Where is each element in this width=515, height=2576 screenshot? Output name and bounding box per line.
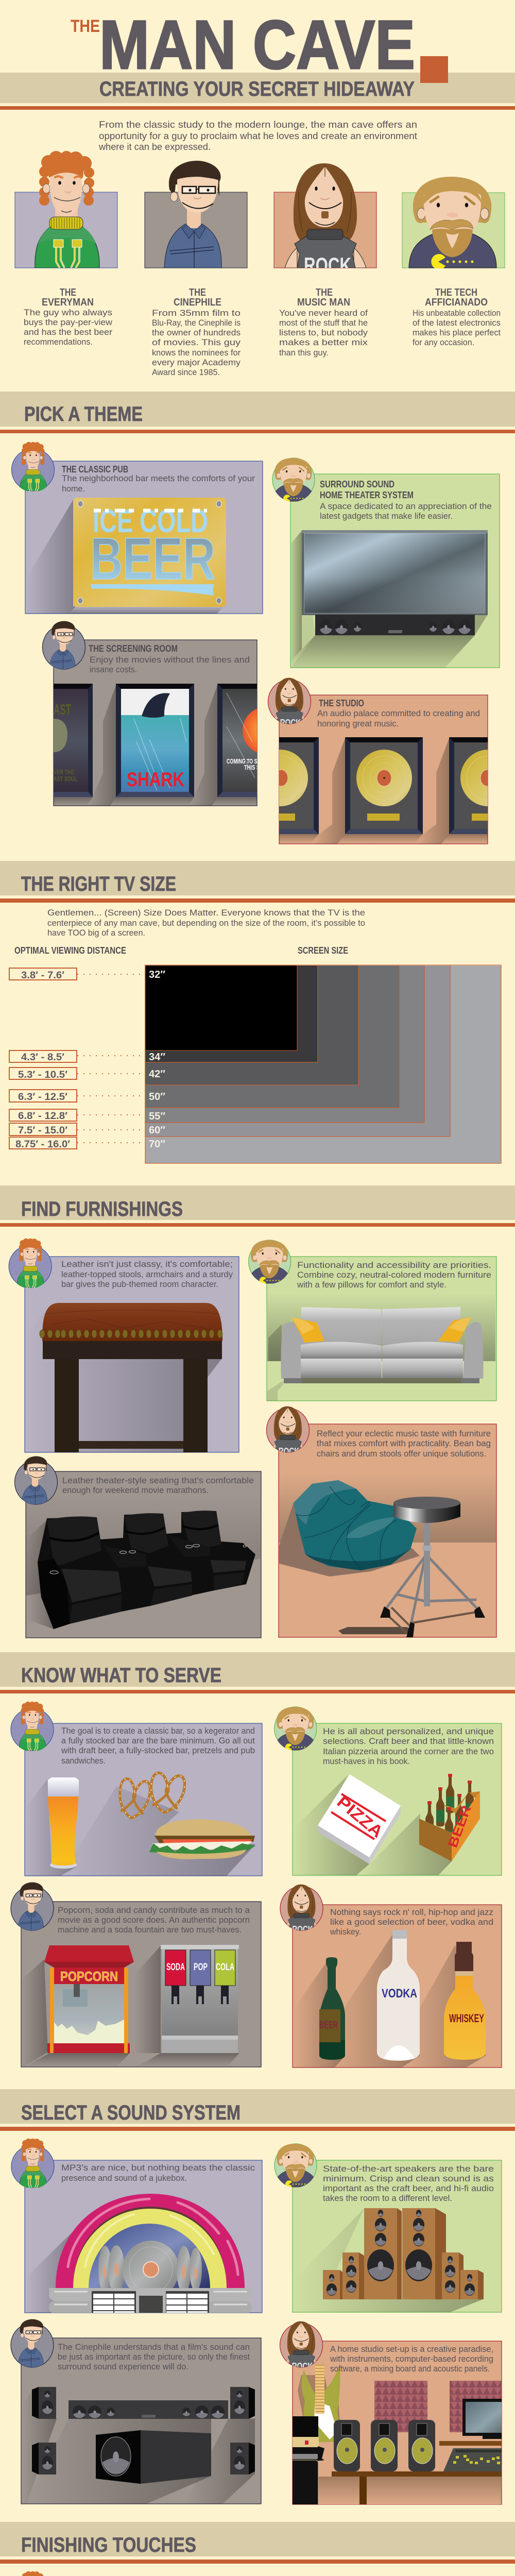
tv size intro text <box>47 908 365 938</box>
illustration: movie poster frames: THIS S <box>244 764 260 771</box>
avatar: everyman <box>11 1702 54 1751</box>
illustration: ice cold beer sign <box>26 498 226 614</box>
card text: movie as a good score does. An authentic popcorn <box>58 1916 250 1925</box>
illustration: popcorn machine and soda fountain <box>21 1945 239 2067</box>
chart: nested screen sizes: 70″ <box>149 1139 165 1150</box>
subtitle: CREATING YOUR SECRET HIDEAWAY <box>99 78 415 100</box>
card heading <box>320 479 414 500</box>
chart: nested screen sizes: 34″ <box>149 1052 165 1063</box>
illustration: leather bar stool <box>25 1303 222 1452</box>
card text <box>330 1908 493 1937</box>
illustration: movie poster frames: COMING TO SA <box>227 757 261 765</box>
character: the music man <box>274 163 376 358</box>
card text <box>61 1726 255 1766</box>
card heading: THE SCREENING ROOM <box>89 643 178 654</box>
panel: surround sound home theater system <box>272 458 500 668</box>
card text <box>61 2163 255 2183</box>
avatar: tech afficianado <box>272 458 315 502</box>
card text: Nothing says rock n' roll, hip-hop and jazz <box>330 1908 493 1917</box>
header stripe <box>0 106 515 110</box>
character: the music man: THE <box>316 287 333 298</box>
avatar: music man: ROCK <box>292 1924 313 1935</box>
card text <box>62 474 255 494</box>
header band <box>0 73 515 103</box>
character: the cinephile <box>145 161 247 377</box>
card text: The neighborhood bar meets the comforts of your <box>62 474 255 483</box>
panel: popcorn and soda <box>11 1883 261 2067</box>
title block <box>0 7 515 110</box>
panel: theater seating <box>14 1456 261 1638</box>
section heading: select a sound system: SELECT A SOUND SYSTEM <box>21 2102 241 2124</box>
character: the tech afficianado: for any occasion. <box>413 338 474 347</box>
card text: A space dedicated to an appreciation of the <box>320 502 492 511</box>
panel: pizza and craft beer <box>274 1707 502 1875</box>
illustration: bean bag and drum stool <box>279 1473 496 1637</box>
card text: that mixes comfort with practicality. Bean bag <box>317 1439 491 1448</box>
card text <box>62 1476 254 1495</box>
illustration: pizza box and six pack: PIZZA <box>334 1792 387 1841</box>
character: the everyman: buys the pay-per-view <box>24 318 112 327</box>
character: the everyman: recommendations. <box>24 337 93 347</box>
chart: viewing distance labels <box>9 968 145 1150</box>
intro text <box>98 120 417 152</box>
card text: takes the room to a different level. <box>323 2194 452 2203</box>
card text: enough for weekend movie marathons. <box>62 1486 209 1495</box>
avatar: cinephile <box>14 1456 58 1504</box>
chart: viewing distance labels: 6.8′ - 12.8′ <box>18 1111 67 1122</box>
accent square <box>420 56 448 83</box>
card text <box>90 655 250 674</box>
card text: A home studio set-up is a creative paradise, <box>330 2345 493 2354</box>
character: the tech afficianado: AFFICIANADO <box>425 297 488 308</box>
section heading: select a sound system <box>0 2089 515 2131</box>
card text: presence and sound of a jukebox. <box>61 2174 187 2183</box>
character: the tech afficianado <box>402 177 505 347</box>
character: the music man: MUSIC MAN <box>297 297 350 308</box>
character: the music man: You've never heard of <box>279 309 368 318</box>
section heading: pick a theme <box>0 392 515 433</box>
card text: sandwiches. <box>61 1756 106 1766</box>
intro text: where it can be expressed. <box>98 142 211 152</box>
illustration: bottles <box>293 1930 486 2067</box>
card heading: HOME THEATER SYSTEM <box>320 490 414 500</box>
card text: home. <box>62 484 85 494</box>
avatar: everyman <box>11 2571 54 2576</box>
illustration: bottles: VODKA <box>382 1987 417 2001</box>
card text: Popcorn, soda and candy contribute as much to a <box>58 1906 250 1915</box>
card text: He is all about personalized, and unique <box>323 1727 494 1736</box>
panel: high end speakers <box>274 2144 502 2312</box>
card text <box>58 1906 250 1935</box>
card heading: SURROUND SOUND <box>320 479 394 489</box>
card text <box>323 2164 494 2203</box>
card text: bar gives the pub-themed room character. <box>61 1280 218 1289</box>
avatar: everyman <box>11 2139 54 2188</box>
section heading: know what to serve <box>0 1652 515 1693</box>
illustration: leather theater seats <box>26 1510 261 1629</box>
chart: viewing distance labels: 8.75′ - 16.0′ <box>15 1139 70 1150</box>
intro text: opportunity for a guy to proclaim what he loves and create an environment <box>99 131 417 141</box>
panel: jukebox <box>11 2139 262 2314</box>
tv size intro text: centerpiece of any man cave, but depending on the size of the room, it's possible to <box>47 919 365 928</box>
card text: with a few pillows for comfort and style. <box>297 1280 447 1290</box>
chart: viewing distance labels: 6.3′ - 12.5′ <box>18 1092 67 1103</box>
avatar: music man <box>267 1406 309 1456</box>
avatar: music man: ROCK <box>280 717 301 728</box>
avatar: music man <box>268 678 311 728</box>
panel: home studio <box>280 2321 504 2504</box>
card text: important as the craft beer, and hi-fi audio <box>323 2184 494 2193</box>
illustration: ice cold beer sign: ICE COLD <box>93 503 208 539</box>
card heading: THE STUDIO <box>319 698 364 708</box>
character: the everyman: The guy who always <box>24 308 112 317</box>
section heading: find furnishings: FIND FURNISHINGS <box>21 1198 183 1221</box>
card text: selections. Craft beer and that little-known <box>323 1737 494 1746</box>
card text: leather-topped stools, armchairs and a sturdy <box>61 1270 233 1279</box>
card text <box>317 1429 491 1459</box>
character: the cinephile: THE <box>189 287 206 298</box>
card text: minimum. Crisp and clean sound is as <box>323 2174 494 2183</box>
panel: bean bag and drum stool <box>267 1406 496 1637</box>
illustration: surround speakers and subwoofer <box>22 2387 255 2504</box>
avatar: cinephile <box>11 1883 54 1930</box>
panel: modern sofa <box>249 1240 496 1401</box>
panel: leather pub stool <box>9 1239 239 1452</box>
card heading: THE CLASSIC PUB <box>62 464 128 474</box>
illustration: jukebox <box>26 2194 252 2314</box>
avatar: music man: ROCK <box>292 2361 313 2371</box>
chart: viewing distance labels: 5.3′ - 10.5′ <box>18 1070 67 1080</box>
character: the cinephile: the owner of hundreds <box>152 328 241 337</box>
card text: insane costs. <box>90 665 137 674</box>
avatar: cinephile <box>42 621 85 669</box>
illustration: bottles: WHISKEY <box>449 2012 484 2025</box>
card text: Reflect your eclectic music taste with furniture <box>317 1429 491 1438</box>
card text: software, a mixing board and acoustic panels. <box>330 2364 490 2374</box>
card text: Leather theater-style seating that's comfortable <box>62 1476 254 1485</box>
character: the music man: most of the stuff that he <box>279 318 368 328</box>
chart: nested screen sizes: 42″ <box>149 1069 165 1080</box>
character: the music man: than this guy. <box>279 348 329 358</box>
card text: honoring great music. <box>317 719 399 728</box>
illustration: home recording studio <box>293 2365 504 2504</box>
avatar: music man <box>280 1885 323 1935</box>
character: the everyman: EVERYMAN <box>42 297 94 308</box>
card text: Combine cozy, neutral-colored modern furniture <box>297 1270 491 1280</box>
card text: whiskey. <box>330 1927 361 1937</box>
illustration: popcorn machine and soda fountain: POPCORN <box>60 1969 118 1984</box>
section heading: finishing touches <box>0 2522 515 2564</box>
avatar: tech afficianado <box>274 2144 317 2188</box>
illustration: movie poster frames: VER THE <box>54 768 74 776</box>
illustration: beer, pretzels and sandwich <box>25 1772 255 1876</box>
panel: surround sound system <box>11 2319 261 2504</box>
illustration: popcorn machine and soda fountain: SODA <box>166 1962 185 1973</box>
character: the cinephile: Award since 1985. <box>152 368 220 377</box>
card text <box>330 2345 493 2374</box>
chart: nested screen sizes: 60″ <box>149 1125 165 1136</box>
illustration: grey sofa with pillows <box>267 1293 495 1401</box>
chart: nested screen sizes: 32″ <box>149 969 165 980</box>
avatar: everyman <box>9 1239 52 1287</box>
column label: screen size: SCREEN SIZE <box>298 945 348 956</box>
section heading: the right tv size: THE RIGHT TV SIZE <box>21 873 176 895</box>
card text <box>320 502 492 521</box>
chart: viewing distance labels: 7.5′ - 15.0′ <box>18 1125 67 1136</box>
card text <box>317 709 480 728</box>
character: the cinephile: From 35mm film to <box>152 309 241 318</box>
card text: a fully stocked bar are the bare minimum. Go all out <box>61 1736 255 1745</box>
tv size intro text: have TOO big of a screen. <box>47 928 145 938</box>
character: the cinephile: CINEPHILE <box>174 297 221 308</box>
chart: viewing distance labels: 3.8′ - 7.6′ <box>21 970 64 981</box>
card text: The goal is to create a classic bar, so a kegerator and <box>61 1726 255 1736</box>
section heading: finishing touches: FINISHING TOUCHES <box>21 2534 196 2556</box>
panel: bar food <box>11 1702 262 1876</box>
character: the music man: ROCK <box>304 253 351 277</box>
illustration: bottles: BEER <box>319 2020 338 2031</box>
intro text: From the classic study to the modern lounge, the man cave offers an <box>99 120 417 130</box>
character: the cinephile: every major Academy <box>152 358 241 367</box>
character: the tech afficianado: makes his place perfect <box>413 328 501 337</box>
section heading: the right tv size <box>0 861 515 903</box>
card text: must-haves in his book. <box>323 1757 410 1766</box>
illustration: movie poster frames: SHARK <box>127 769 184 791</box>
card text: with draft beer, a fully-stocked bar, pretzels and pub <box>61 1746 255 1755</box>
character: the cinephile: of movies. This guy <box>152 338 241 347</box>
section heading: pick a theme: PICK A THEME <box>24 403 143 426</box>
card text: An audio palace committed to creating and <box>317 709 480 718</box>
card text <box>323 1727 494 1766</box>
character: the everyman <box>15 151 117 347</box>
chart: nested screen sizes: 50″ <box>149 1091 165 1103</box>
card text <box>58 2343 250 2371</box>
tv size intro text: Gentlemen... (Screen) Size Does Matter. Everyone knows that the TV is the <box>47 908 365 918</box>
avatar: tech afficianado <box>274 1707 317 1751</box>
chart: viewing distance labels: 4.3′ - 8.5′ <box>21 1052 64 1063</box>
illustration: gold records <box>279 737 488 844</box>
title: man cave: MAN CAVE <box>99 7 415 83</box>
card text: Enjoy the movies without the lines and <box>90 655 250 665</box>
illustration: movie poster frames: AST <box>54 702 71 718</box>
panel: beer vodka and whiskey <box>280 1885 502 2067</box>
title: the: THE <box>71 16 100 36</box>
panel: dartboard and pool balls <box>11 2571 262 2576</box>
card text: MP3's are nice, but nothing beats the classic <box>61 2163 255 2173</box>
card text: be just as important as the picture, so only the finest <box>58 2352 250 2362</box>
card text: latest gadgets that make life easier. <box>320 512 453 521</box>
card text: chairs and drum stools offer unique solutions. <box>317 1449 486 1459</box>
card text: State-of-the-art speakers are the bare <box>323 2164 494 2174</box>
character: the tech afficianado: His unbeatable collection <box>413 309 501 318</box>
card text: Functionality and accessibility are priorities. <box>297 1261 491 1270</box>
illustration: popcorn machine and soda fountain: POP <box>194 1962 208 1973</box>
illustration: wooden speakers <box>317 2208 484 2312</box>
panel: the classic pub <box>11 442 263 614</box>
panel: the screening room <box>42 621 258 806</box>
card text <box>297 1261 491 1290</box>
character: the everyman: and has the best beer <box>24 328 113 337</box>
card text: Italian pizzeria around the corner are the two <box>323 1747 494 1756</box>
illustration: popcorn machine and soda fountain: COLA <box>216 1962 234 1973</box>
character: the music man: makes a better mix <box>279 338 368 347</box>
avatar: tech afficianado <box>249 1240 291 1284</box>
avatar: everyman <box>11 442 55 491</box>
illustration: pizza box and six pack: BEER <box>444 1803 474 1850</box>
avatar: music man <box>280 2321 322 2371</box>
card text: The Cinephile understands that a film's sound can <box>58 2343 250 2352</box>
illustration: ice cold beer sign: BEER <box>90 526 215 592</box>
card text: surround sound experience will do. <box>58 2362 188 2371</box>
card text: machine and a soda fountain are two must-haves. <box>58 1925 242 1935</box>
character: the everyman: THE <box>60 287 76 298</box>
character: the tech afficianado: THE TECH <box>435 287 477 298</box>
illustration: movie poster frames: AST SOUL <box>54 775 77 783</box>
chart: nested screen sizes: 55″ <box>149 1111 165 1122</box>
illustration: pizza box and six pack <box>293 1774 480 1875</box>
avatar: music man: ROCK <box>279 1446 300 1456</box>
card text: with instruments, computer-based recording <box>330 2354 493 2364</box>
chart: nested screen sizes <box>145 965 501 1163</box>
illustration: tv and sound bar <box>291 530 488 668</box>
panel: the studio <box>268 678 488 844</box>
card text <box>61 1260 233 1289</box>
character: the tech afficianado: of the latest electronics <box>413 318 501 328</box>
column label: optimal viewing distance: OPTIMAL VIEWING DISTANCE <box>14 945 126 956</box>
character: the cinephile: Blu-Ray, the Cinephile is <box>152 318 241 328</box>
illustration: movie poster frames <box>54 684 257 806</box>
character: the music man: listens to, but nobody <box>279 328 368 337</box>
card text: Leather isn't just classy, it's comfortable; <box>61 1260 233 1269</box>
section heading: know what to serve: KNOW WHAT TO SERVE <box>21 1664 221 1687</box>
avatar: cinephile <box>11 2319 54 2367</box>
section heading: find furnishings <box>0 1185 515 1227</box>
card text: like a good selection of beer, vodka and <box>330 1918 493 1927</box>
character: the cinephile: knows the nominees for <box>152 348 241 358</box>
